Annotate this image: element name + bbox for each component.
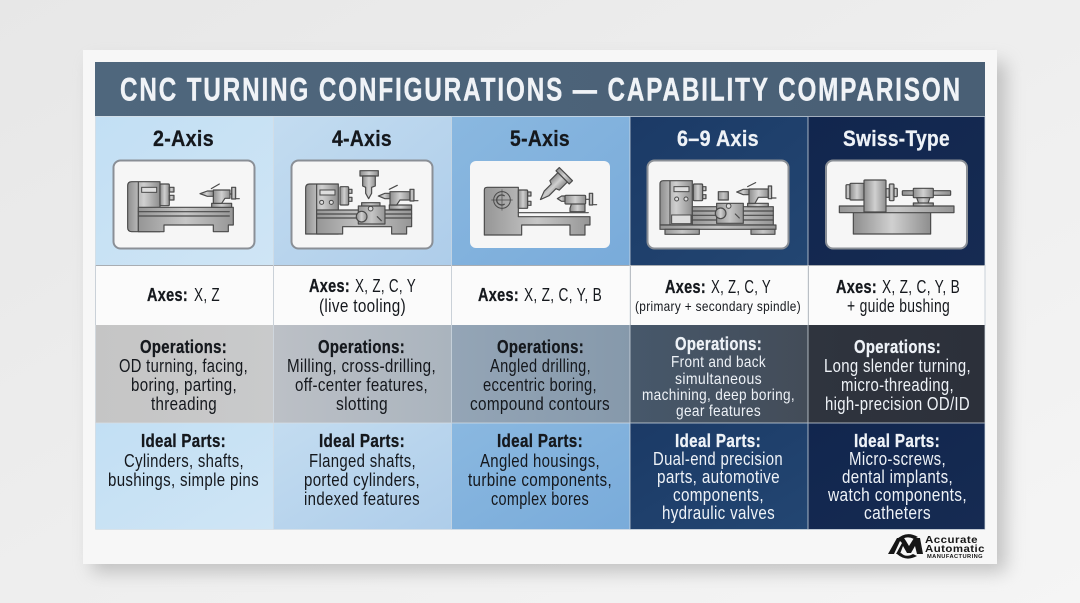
axes cell (452, 266, 630, 326)
ideal parts cell (630, 423, 808, 530)
operations cell: machining, deep boring, (642, 387, 795, 404)
ideal parts cell: Ideal Parts: (854, 431, 940, 451)
ideal parts cell: watch components, (827, 485, 967, 505)
axes cell: + guide bushing (847, 296, 950, 316)
axes cell: Axes: (147, 285, 188, 305)
card shadow (92, 62, 1006, 572)
header cell (451, 116, 630, 265)
axes cell: X, Z (194, 285, 220, 305)
ideal parts cell: Ideal Parts: (675, 431, 761, 451)
logo: Accurate Automatic Manufacturing (888, 534, 985, 560)
operations cell (808, 325, 985, 423)
axes cell (630, 266, 808, 326)
ideal parts cell: dental implants, (842, 467, 953, 487)
operations cell: Operations: (497, 337, 584, 357)
ideal parts cell (451, 423, 630, 530)
operations cell: gear features (676, 403, 761, 420)
axes cell: Axes: (478, 285, 519, 305)
panel: Swiss-Type column (808, 116, 985, 530)
operations cell: Operations: (140, 337, 227, 357)
axes cell: X, Z, C, Y (355, 276, 416, 296)
axes cell: Axes: (309, 276, 350, 296)
ideal parts cell: ported cylinders, (304, 470, 420, 490)
ideal parts cell: components, (673, 485, 764, 505)
ideal parts cell (95, 423, 273, 530)
ideal parts cell: complex bores (491, 489, 589, 509)
ideal parts cell: Dual-end precision (653, 449, 783, 469)
axes cell: Axes: (665, 277, 706, 297)
axes cell (274, 266, 452, 326)
logo wordmark (925, 535, 985, 560)
icon card: 5-axis lathe with angled tool (470, 161, 610, 248)
operations cell: simultaneous (675, 371, 762, 388)
operations cell: Operations: (675, 334, 762, 354)
axes cell: X, Z, C, Y (711, 277, 771, 297)
heading: 4-Axis: 4-Axis (332, 126, 392, 151)
header cell (273, 116, 451, 265)
operations cell (95, 325, 273, 423)
operations cell: Milling, cross-drilling, (287, 356, 436, 376)
header cell (95, 116, 273, 265)
title bar (95, 62, 985, 116)
logo wordmark: Accurate (925, 535, 978, 546)
ideal parts cell: Angled housings, (480, 451, 600, 471)
ideal parts cell: bushings, simple pins (108, 470, 259, 490)
ideal parts cell: Ideal Parts: (497, 431, 583, 451)
operations cell: eccentric boring, (483, 375, 597, 395)
ideal parts cell: hydraulic valves (662, 503, 775, 523)
axes cell (96, 266, 274, 326)
card (83, 50, 997, 564)
heading: 6-9 Axis: 6–9 Axis (677, 126, 759, 151)
icon card: Swiss-type lathe (826, 160, 967, 248)
logo wordmark: Automatic (925, 544, 985, 555)
axes cell: X, Z, C, Y, B (524, 285, 602, 305)
ideal parts cell: Ideal Parts: (141, 431, 226, 451)
operations cell (630, 325, 808, 423)
axes cell: (primary + secondary spindle) (635, 298, 801, 314)
axes cell: (live tooling) (319, 296, 406, 316)
operations cell: Long slender turning, (824, 356, 971, 376)
operations cell: micro-threading, (841, 375, 954, 395)
logo wordmark: MANUFACTURING (927, 554, 983, 560)
operations cell: Operations: (318, 337, 405, 357)
icon card: 4-axis lathe with live tool (292, 160, 432, 248)
ideal parts cell: Cylinders, shafts, (124, 451, 244, 471)
operations cell: boring, parting, (131, 375, 237, 395)
operations cell: Operations: (854, 337, 941, 357)
header cell (808, 116, 985, 265)
ideal parts cell: turbine components, (468, 470, 612, 490)
icon card: multi-axis lathe (648, 160, 788, 248)
axes cell: Axes: (836, 277, 877, 297)
panel: 5-Axis column (451, 116, 630, 530)
ideal parts cell (273, 423, 451, 530)
operations cell (273, 325, 451, 423)
panel: 6-9 Axis column (630, 116, 808, 530)
icon card: 2-axis lathe (114, 160, 254, 248)
operations cell: Front and back (671, 354, 767, 371)
panel: 4-Axis column (273, 116, 452, 530)
operations cell: slotting (336, 394, 388, 414)
axes cell (808, 266, 985, 326)
ideal parts cell: catheters (864, 503, 931, 523)
operations cell: high-precision OD/ID (825, 394, 970, 414)
operations cell: Angled drilling, (490, 356, 591, 376)
operations cell: OD turning, facing, (119, 356, 248, 376)
ideal parts cell: Micro-screws, (849, 449, 946, 469)
logo mark (888, 534, 923, 559)
operations cell: off-center features, (295, 375, 428, 395)
header cell (630, 116, 808, 265)
table grid lines (96, 116, 985, 530)
heading: 5-Axis: 5-Axis (510, 126, 570, 151)
operations cell (451, 325, 630, 423)
axes cell: X, Z, C, Y, B (882, 277, 960, 297)
operations cell: threading (151, 394, 217, 414)
operations cell: compound contours (470, 394, 610, 414)
ideal parts cell: Flanged shafts, (309, 451, 416, 471)
panel: 2-Axis column (95, 116, 274, 530)
ideal parts cell (808, 423, 985, 530)
ideal parts cell: indexed features (304, 489, 420, 509)
ideal parts cell: Ideal Parts: (319, 431, 405, 451)
heading: 2-Axis: 2-Axis (153, 126, 214, 151)
ideal parts cell: parts, automotive (657, 467, 780, 487)
heading: Swiss-Type: Swiss-Type (843, 126, 950, 151)
